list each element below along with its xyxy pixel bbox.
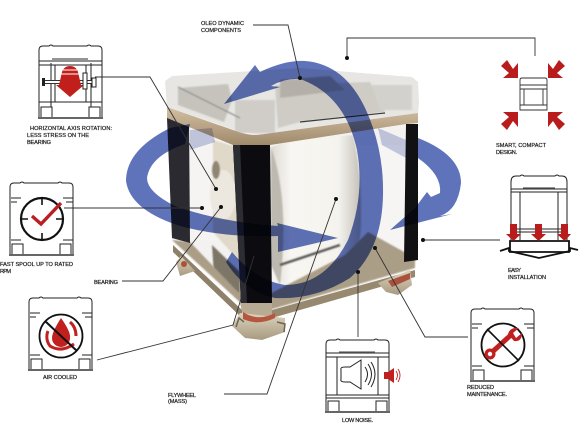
left foot [176, 256, 195, 276]
text: oleo dynamic components: COMPONENTS [201, 28, 241, 34]
text: reduced maintenance: REDUCED [467, 385, 494, 391]
text: oleo dynamic components: OLEO DYNAMIC [201, 21, 244, 27]
right foot [378, 270, 412, 295]
icon: low noise [325, 339, 400, 412]
text: horizontal axis rotation [27, 126, 112, 146]
front foot [232, 312, 285, 340]
vertical arrow [224, 61, 383, 298]
text: horizontal axis rotation: BEARING [27, 140, 51, 146]
text: easy installation: EASY [508, 268, 521, 274]
text: fast spool: FAST SPOOL UP TO RATED [0, 262, 73, 268]
text: flywheel [168, 393, 196, 405]
leader: fast spool [64, 206, 204, 210]
leader: horizontal axis [95, 77, 218, 191]
text: fast spool [0, 262, 73, 275]
top cover [165, 68, 419, 135]
text: smart compact design: DESIGN. [496, 150, 517, 156]
front pillar [233, 145, 272, 303]
left pillar [167, 118, 190, 243]
text: flywheel: (MASS) [168, 399, 187, 405]
leader lines [64, 25, 535, 394]
text: smart compact design: SMART, COMPACT [496, 143, 547, 149]
icon: reduced maintenance [470, 308, 535, 381]
glass interior [172, 115, 415, 310]
horizontal arrow: left sweep [126, 124, 338, 252]
leader: bearing [122, 205, 223, 281]
text: low noise: LOW NOISE. [342, 418, 373, 424]
horizontal arrow: right sweep [390, 138, 461, 230]
text: air cooled: AIR COOLED [43, 375, 77, 381]
icon: horizontal axis rotation [38, 45, 103, 118]
icon: fast spool clock [9, 182, 74, 255]
leader: reduced maintenance [373, 246, 468, 337]
leader: compact design [345, 38, 535, 60]
leader: flywheel [224, 197, 338, 394]
icon: smart compact design [501, 60, 565, 130]
leader: oleo dynamic components [253, 25, 302, 80]
text: flywheel: FLYWHEEL [168, 393, 196, 399]
text: fast spool: RPM [0, 269, 11, 275]
base plate [172, 232, 415, 312]
leader: low noise [356, 270, 360, 337]
horizontal arrow: back faint [190, 128, 215, 150]
right pillar [404, 124, 418, 262]
bearing housing [210, 140, 240, 300]
text: horizontal axis rotation: LESS STRESS ON THE [27, 133, 89, 139]
tan band [167, 107, 418, 145]
text: horizontal axis rotation: HORIZONTAL AXIS ROTATION: [30, 126, 112, 132]
text: smart compact design [496, 143, 547, 156]
text: oleo dynamic components [201, 21, 244, 34]
text: reduced maintenance [467, 385, 507, 398]
text: easy installation: INSTALLATION [508, 275, 546, 281]
text: easy installation [508, 268, 546, 281]
blue rotation arrows [126, 61, 461, 298]
leader: easy installation [421, 238, 500, 242]
leader: air cooled [97, 256, 254, 360]
flywheel [271, 135, 361, 290]
text: bearing label: BEARING [94, 280, 118, 286]
icon: easy installation [500, 175, 578, 258]
text: reduced maintenance: MAINTENANCE. [467, 392, 507, 398]
machine: flywheel module photo [165, 68, 419, 340]
icon: air cooled [28, 297, 93, 370]
